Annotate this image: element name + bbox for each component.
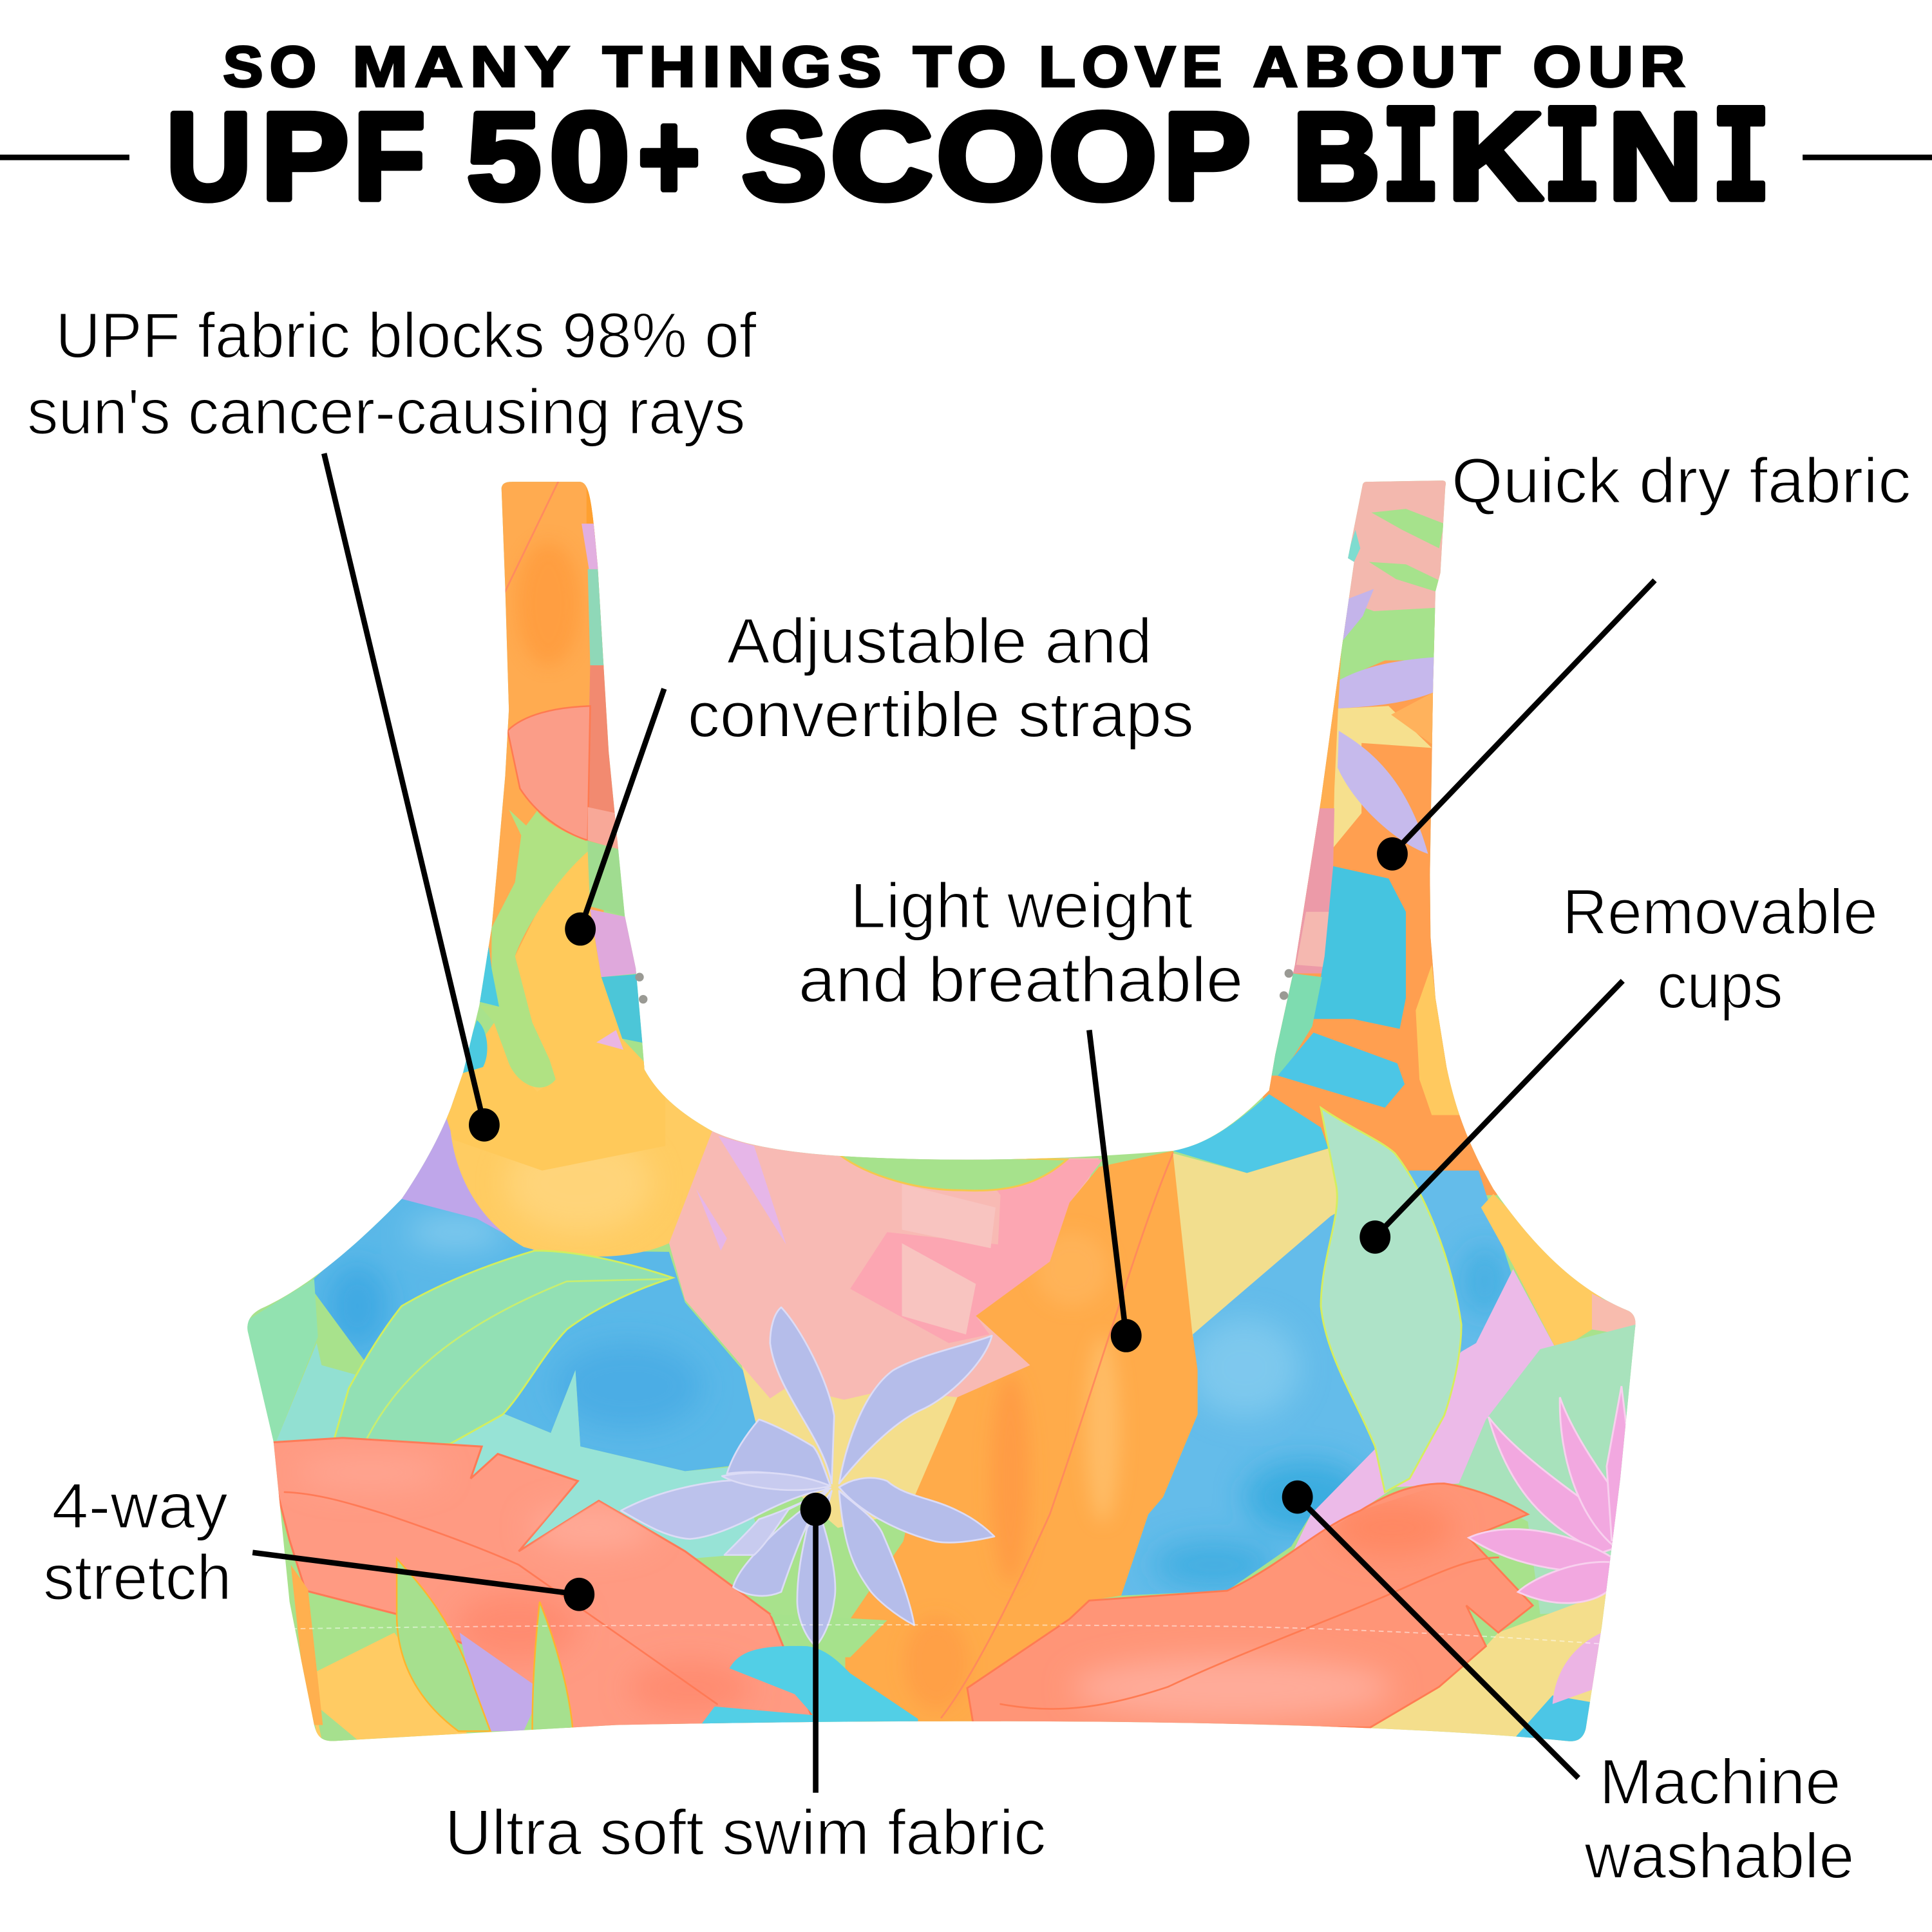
title line two: I xyxy=(1542,85,1602,241)
left coral wash xyxy=(296,1455,752,1715)
monstera light fingers xyxy=(902,1184,996,1334)
left shoulder mint xyxy=(247,1279,318,1446)
callout: ultra soft: Ultra soft swim fabric xyxy=(445,1797,1046,1868)
lower right cyan xyxy=(1513,1696,1602,1750)
bottom green under flower xyxy=(770,1614,887,1657)
callout: straps: Adjustable and xyxy=(727,605,1152,677)
callout: light weight: and breathable xyxy=(799,944,1243,1016)
yellow right leaf xyxy=(1481,1194,1602,1352)
callout: UPF fabric xyxy=(27,300,757,1142)
monstera darker pink xyxy=(850,1159,1103,1343)
title line two: K xyxy=(1448,87,1542,225)
product illustration: bikini top xyxy=(234,468,1651,1750)
right strap pattern xyxy=(1263,475,1497,1195)
left body: blue leaf xyxy=(308,1199,770,1471)
lavender flower xyxy=(621,1307,994,1646)
title line one xyxy=(223,34,1692,99)
left shoulder teal xyxy=(274,1343,357,1448)
title line one: LOVE xyxy=(1039,34,1229,99)
bottom green leaf two xyxy=(533,1602,573,1731)
title line two: O xyxy=(1048,87,1157,225)
cyan top right xyxy=(1173,1094,1328,1173)
bottom left yellow xyxy=(308,1633,475,1743)
title line one: MANY xyxy=(352,34,576,99)
callout: quick dry: Quick dry fabric xyxy=(1452,446,1911,517)
pale yellow right panel xyxy=(1173,1146,1337,1337)
title line two: F xyxy=(354,87,425,225)
bottom cyan blob xyxy=(696,1646,918,1731)
lower right pale yellow xyxy=(1356,1589,1614,1750)
title line two: S xyxy=(742,87,827,225)
callout: removable cups xyxy=(1359,876,1878,1254)
title line two xyxy=(166,85,1770,241)
title line two: P xyxy=(1163,87,1251,225)
strap rings xyxy=(635,969,1293,1003)
callout: 4-way stretch: 4-way xyxy=(52,1470,228,1542)
title line two: O xyxy=(936,87,1045,225)
callout: removable cups: cups xyxy=(1657,951,1783,1022)
mint leaf xyxy=(333,1251,673,1444)
callout: machine washable xyxy=(1282,1481,1854,1892)
yellow blob pale wash xyxy=(505,1133,653,1232)
lower right pink petal xyxy=(1553,1633,1602,1704)
teal mid area xyxy=(444,1370,764,1558)
right coral wash xyxy=(1072,1501,1454,1719)
title line two: U xyxy=(166,87,251,225)
mint leaf vein xyxy=(367,1279,667,1438)
bottom green leaf one xyxy=(397,1558,490,1731)
callout: straps xyxy=(565,605,1194,945)
pale yellow under monstera xyxy=(742,1365,959,1528)
lilac monstera gaps xyxy=(696,1136,786,1251)
left body: yellow blob xyxy=(450,1035,712,1256)
orange leaf wash xyxy=(904,1232,1120,1710)
callout: machine washable: Machine xyxy=(1599,1747,1841,1818)
title line two: P xyxy=(261,87,348,225)
green arc xyxy=(839,1155,1067,1191)
title line one: SO xyxy=(223,34,323,99)
hem stitching xyxy=(283,1625,1614,1645)
bottom left orange sliver xyxy=(291,1565,323,1725)
title line two: N xyxy=(1608,87,1703,225)
title line one: OUR xyxy=(1533,34,1692,99)
title line two: B xyxy=(1293,87,1380,225)
title line two: 5 xyxy=(467,87,541,225)
pink monstera xyxy=(669,1131,1099,1399)
title line two: C xyxy=(831,87,933,225)
callout: 4-way stretch: stretch xyxy=(43,1542,232,1613)
callout: quick dry xyxy=(1377,446,1911,871)
callout: UPF fabric: sun's cancer-causing rays xyxy=(27,376,746,448)
callout: 4-way stretch xyxy=(43,1470,594,1613)
title line one: THINGS xyxy=(603,34,888,99)
left coral vein xyxy=(285,1492,717,1704)
callout: light weight: Light weight xyxy=(850,871,1193,942)
callout: light weight xyxy=(799,871,1243,1352)
bottom left corner green xyxy=(314,1704,357,1745)
callout: straps: convertible straps xyxy=(688,679,1194,751)
title line one: ABOUT xyxy=(1253,34,1507,99)
callout: machine washable: washable xyxy=(1584,1821,1854,1892)
left coral leaf xyxy=(265,1438,813,1731)
title xyxy=(166,34,1770,241)
callout: UPF fabric: UPF fabric blocks 98% of xyxy=(55,300,757,372)
pink flower xyxy=(1469,1386,1639,1603)
lavender patch xyxy=(460,1633,542,1731)
title line two: 0 xyxy=(549,87,630,225)
pink corner xyxy=(1592,1294,1645,1337)
right coral leaf xyxy=(967,1484,1533,1727)
title line two: I xyxy=(1381,85,1441,241)
callout: removable cups: Removable xyxy=(1562,876,1878,948)
left strap pattern xyxy=(444,475,665,1171)
left body: lavender shoulder xyxy=(401,1094,535,1250)
right coral vein xyxy=(1001,1557,1499,1709)
central orange leaf xyxy=(845,1151,1198,1725)
title line two: I xyxy=(1712,85,1770,241)
title line two: + xyxy=(638,87,700,225)
blue leaf wash xyxy=(1152,1244,1510,1589)
blue leaf wash xyxy=(327,1215,703,1429)
mint leaf right xyxy=(1321,1108,1461,1492)
right blue leaf xyxy=(1121,1171,1518,1596)
orange leaf vein xyxy=(942,1153,1173,1718)
lilac pink panel xyxy=(1294,1269,1557,1550)
callout: ultra soft xyxy=(445,1493,1046,1868)
title line one: TO xyxy=(913,34,1013,99)
mint right corner xyxy=(1459,1322,1645,1614)
